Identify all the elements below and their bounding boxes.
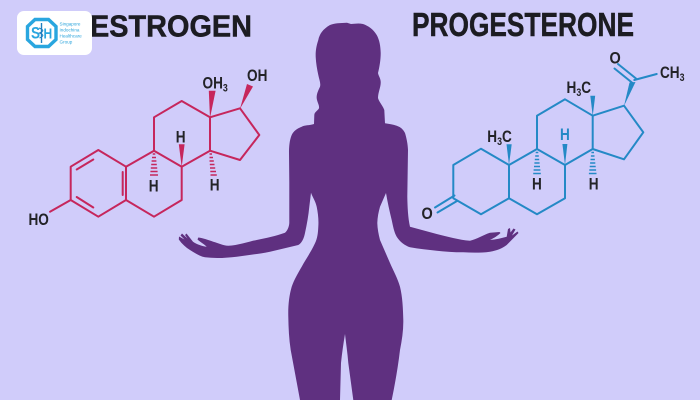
estrogen molecule: OH <box>247 67 267 85</box>
estrogen molecule <box>28 67 267 229</box>
logo text: Healthcare <box>60 34 82 38</box>
progesterone molecule: C <box>581 79 591 97</box>
progesterone molecule: H <box>566 79 576 97</box>
estrogen molecule: HO <box>28 211 49 229</box>
estrogen molecule: H <box>210 176 220 195</box>
progesterone molecule: O <box>422 205 433 223</box>
estrogen molecule: H <box>176 128 186 147</box>
logo text: Indochina <box>60 28 80 32</box>
progesterone molecule: 3 <box>497 136 502 148</box>
estrogen molecule: 3 <box>223 83 228 95</box>
progesterone molecule <box>422 49 685 223</box>
heading: estrogen: ESTROGEN <box>90 8 252 44</box>
progesterone molecule: CH <box>660 64 680 82</box>
logo badge <box>17 11 92 55</box>
logo text: Group <box>60 40 73 44</box>
woman silhouette <box>179 23 519 400</box>
progesterone molecule: 3 <box>680 72 685 84</box>
progesterone molecule: O <box>610 49 621 68</box>
progesterone molecule: H <box>560 126 570 144</box>
estrogen molecule: OH <box>202 74 223 93</box>
logo text <box>60 22 82 44</box>
logo text: Singapore <box>60 22 81 26</box>
logo emblem: H <box>44 25 52 42</box>
progesterone molecule: C <box>502 128 512 146</box>
logo emblem: S <box>31 24 40 43</box>
progesterone molecule: H <box>532 175 542 194</box>
progesterone molecule: 3 <box>576 87 582 99</box>
progesterone molecule: H <box>487 128 497 146</box>
logo emblem <box>28 20 56 46</box>
progesterone molecule: H <box>589 175 599 194</box>
heading: progesterone: PROGESTERONE <box>412 6 634 43</box>
estrogen molecule: H <box>149 177 159 196</box>
